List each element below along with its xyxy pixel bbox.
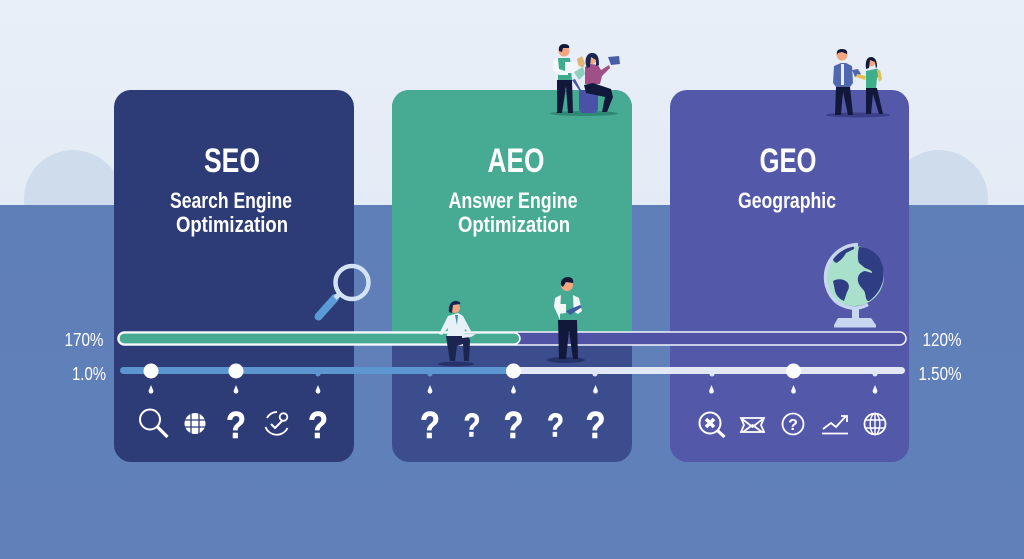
icon: search cross (700, 412, 724, 437)
panel: GEO (670, 90, 909, 462)
label: 170%: 170% (64, 330, 104, 350)
background sky (0, 0, 1024, 206)
AEO question marks: ? (420, 405, 440, 447)
SEO heading: SEO (204, 142, 260, 180)
SEO subtitle (170, 188, 292, 237)
AEO question marks: ? (464, 406, 480, 444)
icon: envelope (741, 418, 764, 432)
chart: progress bar (118, 332, 906, 345)
AEO question marks: ? (504, 405, 524, 447)
icon: question mark 2: ? (308, 405, 328, 447)
figures: seated woman on bar (438, 301, 476, 366)
figures: standing man with book (547, 277, 585, 363)
panel: SEO (114, 90, 354, 462)
label: 1.0%: 1.0% (72, 364, 106, 384)
AEO subtitle: Optimization (458, 212, 570, 237)
icon: large magnifying glass (318, 266, 368, 316)
SEO subtitle: Optimization (176, 212, 288, 237)
icon: target check (266, 412, 288, 435)
icon: wire globe (864, 414, 886, 434)
icon: globe (824, 244, 884, 328)
GEO heading: GEO (760, 142, 816, 180)
AEO question marks (420, 405, 606, 447)
right hill (890, 150, 988, 248)
icon: grid globe (184, 413, 206, 434)
SEO subtitle: Search Engine (170, 188, 292, 213)
label: 1.50%: 1.50% (918, 364, 962, 384)
background lower band (0, 205, 1024, 559)
figures: GEO pair on card top (826, 49, 890, 118)
AEO subtitle (448, 188, 578, 237)
icon: question mark 1: ? (226, 405, 246, 447)
chart: slider (120, 364, 905, 394)
panel: AEO (392, 90, 632, 462)
icon: search (140, 410, 168, 437)
icon: circled question (782, 414, 804, 434)
icon: trend chart (822, 416, 848, 434)
left hill (24, 150, 122, 248)
AEO question marks: ? (586, 405, 606, 447)
figures: AEO pair on card top (550, 44, 620, 116)
GEO subtitle: Geographic (738, 188, 836, 213)
AEO heading: AEO (488, 142, 544, 180)
icon: circled question: ? (788, 417, 798, 434)
AEO question marks: ? (547, 406, 564, 444)
AEO subtitle: Answer Engine (448, 188, 578, 213)
label: 120%: 120% (922, 330, 962, 350)
